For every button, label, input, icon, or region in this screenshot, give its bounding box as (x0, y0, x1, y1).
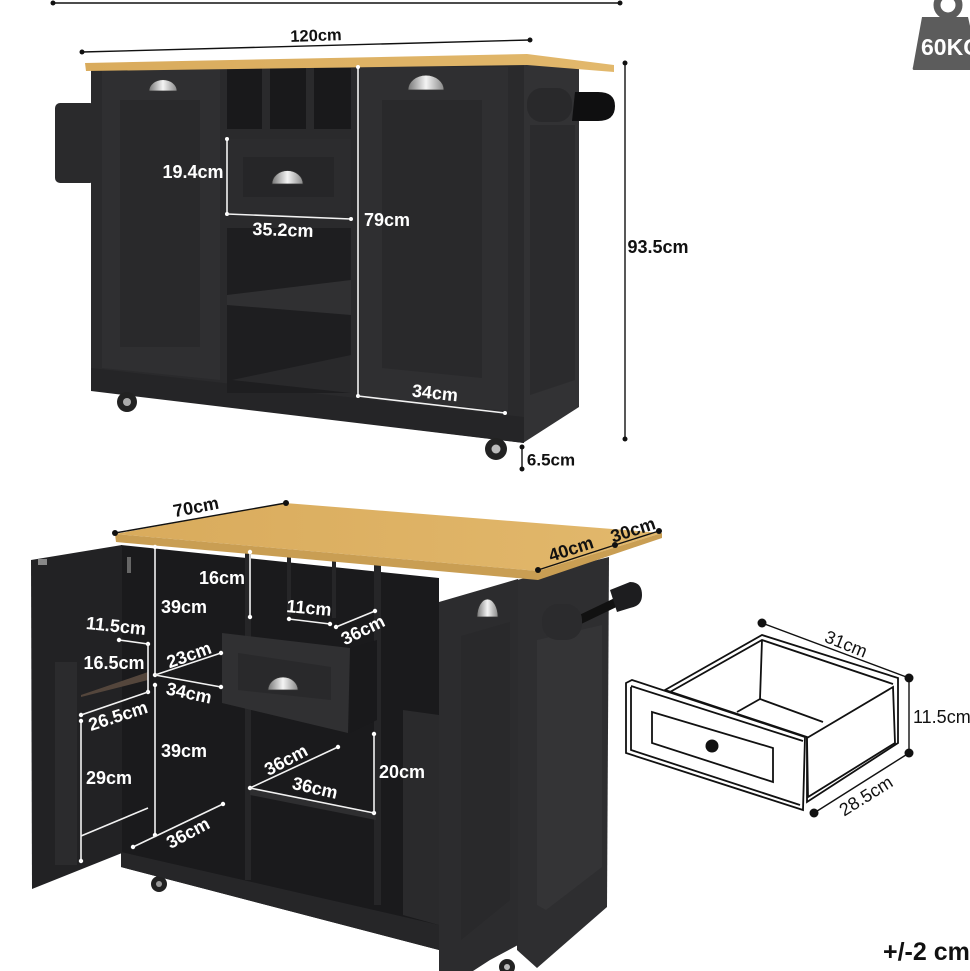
weight icon: 60KG (913, 0, 970, 70)
19.4cm dimension: 19.4cm (162, 162, 224, 182)
36cm floor dimension (131, 802, 225, 853)
cabinet side (523, 63, 579, 443)
wood top (85, 54, 614, 72)
34cm interior dimension: 34cm (164, 678, 214, 708)
11cm dimension: 11cm (286, 596, 332, 620)
centre drawer (229, 139, 351, 213)
casters (151, 876, 515, 971)
31cm drawer dimension (758, 618, 914, 682)
34cm dimension: 34cm (411, 381, 459, 405)
39cm upper dimension (153, 545, 207, 677)
40cm dimension: 40cm (546, 532, 596, 566)
40cm dimension (535, 532, 618, 573)
side panel with towel bar (517, 557, 609, 968)
16.5cm door dimension (83, 644, 150, 694)
16.5cm door dimension: 16.5cm (83, 653, 145, 673)
120cm dimension (80, 26, 532, 54)
39cm lower dimension (153, 683, 207, 837)
70cm dimension: 70cm (171, 493, 221, 521)
6.5cm dimension (520, 444, 575, 472)
36cm floor dimension: 36cm (163, 813, 213, 853)
left door (102, 70, 220, 380)
pulled out drawer (222, 633, 377, 733)
drawer line drawing (626, 635, 898, 810)
93.5cm dimension: 93.5cm (627, 237, 689, 257)
tolerance note: +/-2 cm (883, 938, 970, 966)
36cm shelf depth dimension: 36cm (261, 740, 311, 780)
base strip (91, 368, 524, 443)
open view cabinet (31, 503, 662, 971)
handles (268, 677, 298, 690)
79cm dimension (356, 65, 410, 398)
36cm cubby depth dimension: 36cm (338, 611, 388, 649)
23cm dimension: 23cm (164, 638, 214, 672)
front view cabinet (55, 54, 615, 460)
36cm shelf width dimension (250, 773, 376, 815)
interior (121, 545, 439, 950)
39cm lower dimension: 39cm (161, 741, 207, 761)
dividers and cubby walls (245, 550, 381, 905)
cabinet body (91, 62, 524, 443)
29cm door dimension: 29cm (86, 768, 132, 788)
towel bar (542, 582, 642, 640)
30cm dimension: 30cm (608, 513, 658, 547)
centre cubbies (227, 68, 351, 129)
36cm shelf depth dimension (248, 740, 340, 790)
35.2cm dimension: 35.2cm (252, 219, 314, 241)
wood top (115, 503, 662, 571)
top overall width dimension line (50, 0, 622, 6)
16cm dimension: 16cm (199, 568, 245, 588)
left open door (31, 545, 122, 889)
28.5cm drawer dimension: 28.5cm (836, 772, 896, 820)
19.4cm dimension (162, 137, 229, 216)
36cm shelf width dimension: 36cm (290, 773, 340, 803)
20cm dimension (372, 732, 425, 813)
side hook panel (55, 103, 95, 183)
towel bar (527, 88, 615, 122)
70cm dimension (112, 493, 289, 536)
26.5cm door dimension: 26.5cm (86, 697, 150, 735)
39cm upper dimension: 39cm (161, 597, 207, 617)
35.2cm dimension (227, 214, 353, 241)
23cm dimension (155, 638, 223, 675)
base strip (121, 852, 439, 950)
lower shelves (227, 228, 351, 393)
handles (149, 75, 444, 184)
34cm dimension (358, 381, 507, 415)
right door (360, 67, 508, 411)
11.5cm drawer dimension: 11.5cm (913, 707, 970, 727)
31cm drawer dimension: 31cm (822, 626, 870, 662)
29cm door dimension (79, 719, 148, 863)
11.5cm door dimension: 11.5cm (85, 613, 147, 639)
16cm dimension (199, 550, 252, 619)
right door edge (439, 579, 518, 971)
casters (117, 392, 507, 460)
79cm dimension: 79cm (364, 210, 410, 230)
6.5cm dimension: 6.5cm (527, 450, 575, 470)
20cm dimension: 20cm (379, 762, 425, 782)
28.5cm drawer dimension (810, 753, 909, 820)
93.5cm dimension (622, 60, 689, 442)
34cm interior dimension (155, 675, 223, 708)
120cm dimension: 120cm (290, 26, 342, 46)
11.5cm drawer dimension (904, 678, 970, 758)
